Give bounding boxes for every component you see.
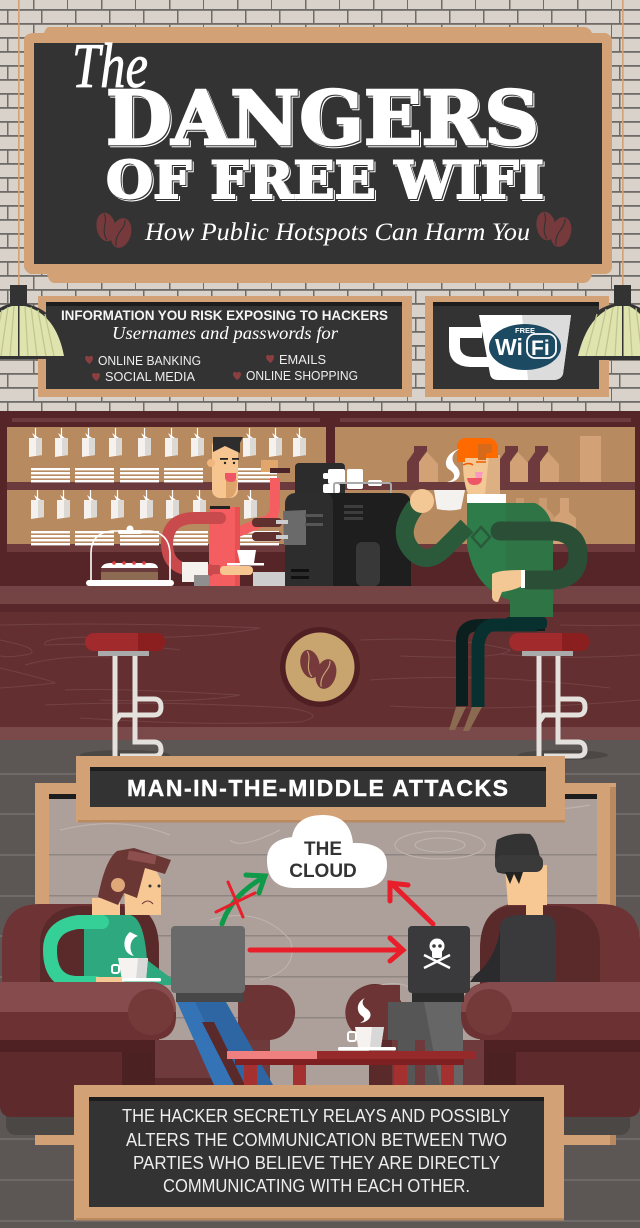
character: victim (50, 848, 273, 1085)
arrow: blocked green (216, 875, 265, 924)
coffee cup on table (338, 998, 396, 1050)
character: barista (167, 437, 290, 586)
armchair: right front arm (461, 982, 640, 1040)
list: risks: EMAILS (279, 352, 326, 367)
floor (0, 740, 640, 1228)
title chalkboard (24, 27, 612, 283)
character: hacker (388, 834, 556, 1085)
torso (467, 503, 553, 617)
laptop: hacker with skull (408, 926, 470, 1002)
icon: left coffee beans (90, 209, 142, 255)
panel: explanation board (74, 1085, 564, 1220)
counter (0, 586, 640, 740)
panel: man in the middle scene frame (35, 783, 616, 1145)
character: customer (405, 438, 578, 731)
cloud: CLOUD (289, 861, 357, 882)
coffee machine (253, 463, 411, 586)
shelf: bottles (407, 436, 601, 544)
logo: wifi: FREE (515, 326, 535, 335)
jeans (177, 1002, 273, 1085)
panel: free wifi cup (425, 296, 609, 397)
list: risks: ONLINE SHOPPING (246, 368, 358, 383)
icon: white mug (449, 315, 571, 380)
explanation text (122, 1106, 510, 1196)
group head (283, 510, 306, 545)
icon: right coffee beans (530, 208, 582, 254)
explanation text: ALTERS THE COMMUNICATION BETWEEN TWO (126, 1130, 507, 1150)
legs (449, 617, 547, 731)
list: risks: SOCIAL MEDIA (105, 369, 195, 384)
lamp: right (571, 285, 640, 360)
subtitle: How Public Hotspots Can Harm You (144, 219, 530, 246)
lamp: left (0, 285, 70, 359)
title: of free wifi: OF FREE WIFI (106, 151, 544, 211)
bar back wall (0, 411, 640, 586)
emblem: coffee bean seal (280, 627, 360, 707)
hanging cords (18, 0, 624, 286)
logo: wifi: Fi (531, 337, 550, 360)
shelf: hanging tea tags (29, 428, 306, 519)
panel: information at risk (38, 296, 412, 397)
arrow: user to hacker (250, 938, 403, 961)
list: risks (85, 352, 358, 384)
header board: man-in-the-middle attacks (76, 756, 565, 822)
steam (446, 449, 460, 482)
head (463, 450, 500, 494)
armchair: right (345, 904, 640, 1117)
list: risks: ONLINE BANKING (98, 353, 201, 368)
armchair: left (0, 904, 295, 1117)
heading: information at risk: INFORMATION YOU RISK EXPOSING TO HACKERS (61, 308, 388, 323)
red cross (216, 882, 255, 917)
floor shadow under chairs (6, 1105, 630, 1135)
armchair: left front arm (0, 982, 176, 1040)
icon: skull and crossbones (424, 938, 450, 968)
laptop: victim (171, 926, 245, 1002)
title: The: The (72, 30, 148, 101)
explanation text: COMMUNICATING WITH EACH OTHER. (163, 1176, 470, 1196)
arm with cup (405, 506, 467, 558)
explanation text: PARTIES WHO BELIEVE THEY ARE DIRECTLY (133, 1153, 500, 1173)
subheading: Usernames and passwords for (112, 323, 339, 343)
stool: right (509, 633, 608, 760)
heading: MAN-IN-THE-MIDDLE ATTACKS (127, 775, 508, 801)
cloud (267, 815, 387, 888)
title: Dangers: DANGERS (106, 76, 539, 162)
cake under dome (86, 526, 174, 586)
logo: wifi: Wi (495, 334, 523, 360)
explanation text: THE HACKER SECRETLY RELAYS AND POSSIBLY (122, 1106, 510, 1126)
wood grain (0, 624, 640, 723)
coffee cups on machine (323, 469, 382, 493)
cloud: THE (304, 839, 342, 860)
logo: wifi (489, 324, 561, 370)
coffee table (227, 1051, 475, 1087)
brick wall (0, 0, 640, 411)
arm across (500, 531, 578, 580)
stool: left (80, 633, 170, 760)
arrow: hacker to cloud (390, 883, 433, 924)
shelf: plate stacks (31, 468, 279, 545)
